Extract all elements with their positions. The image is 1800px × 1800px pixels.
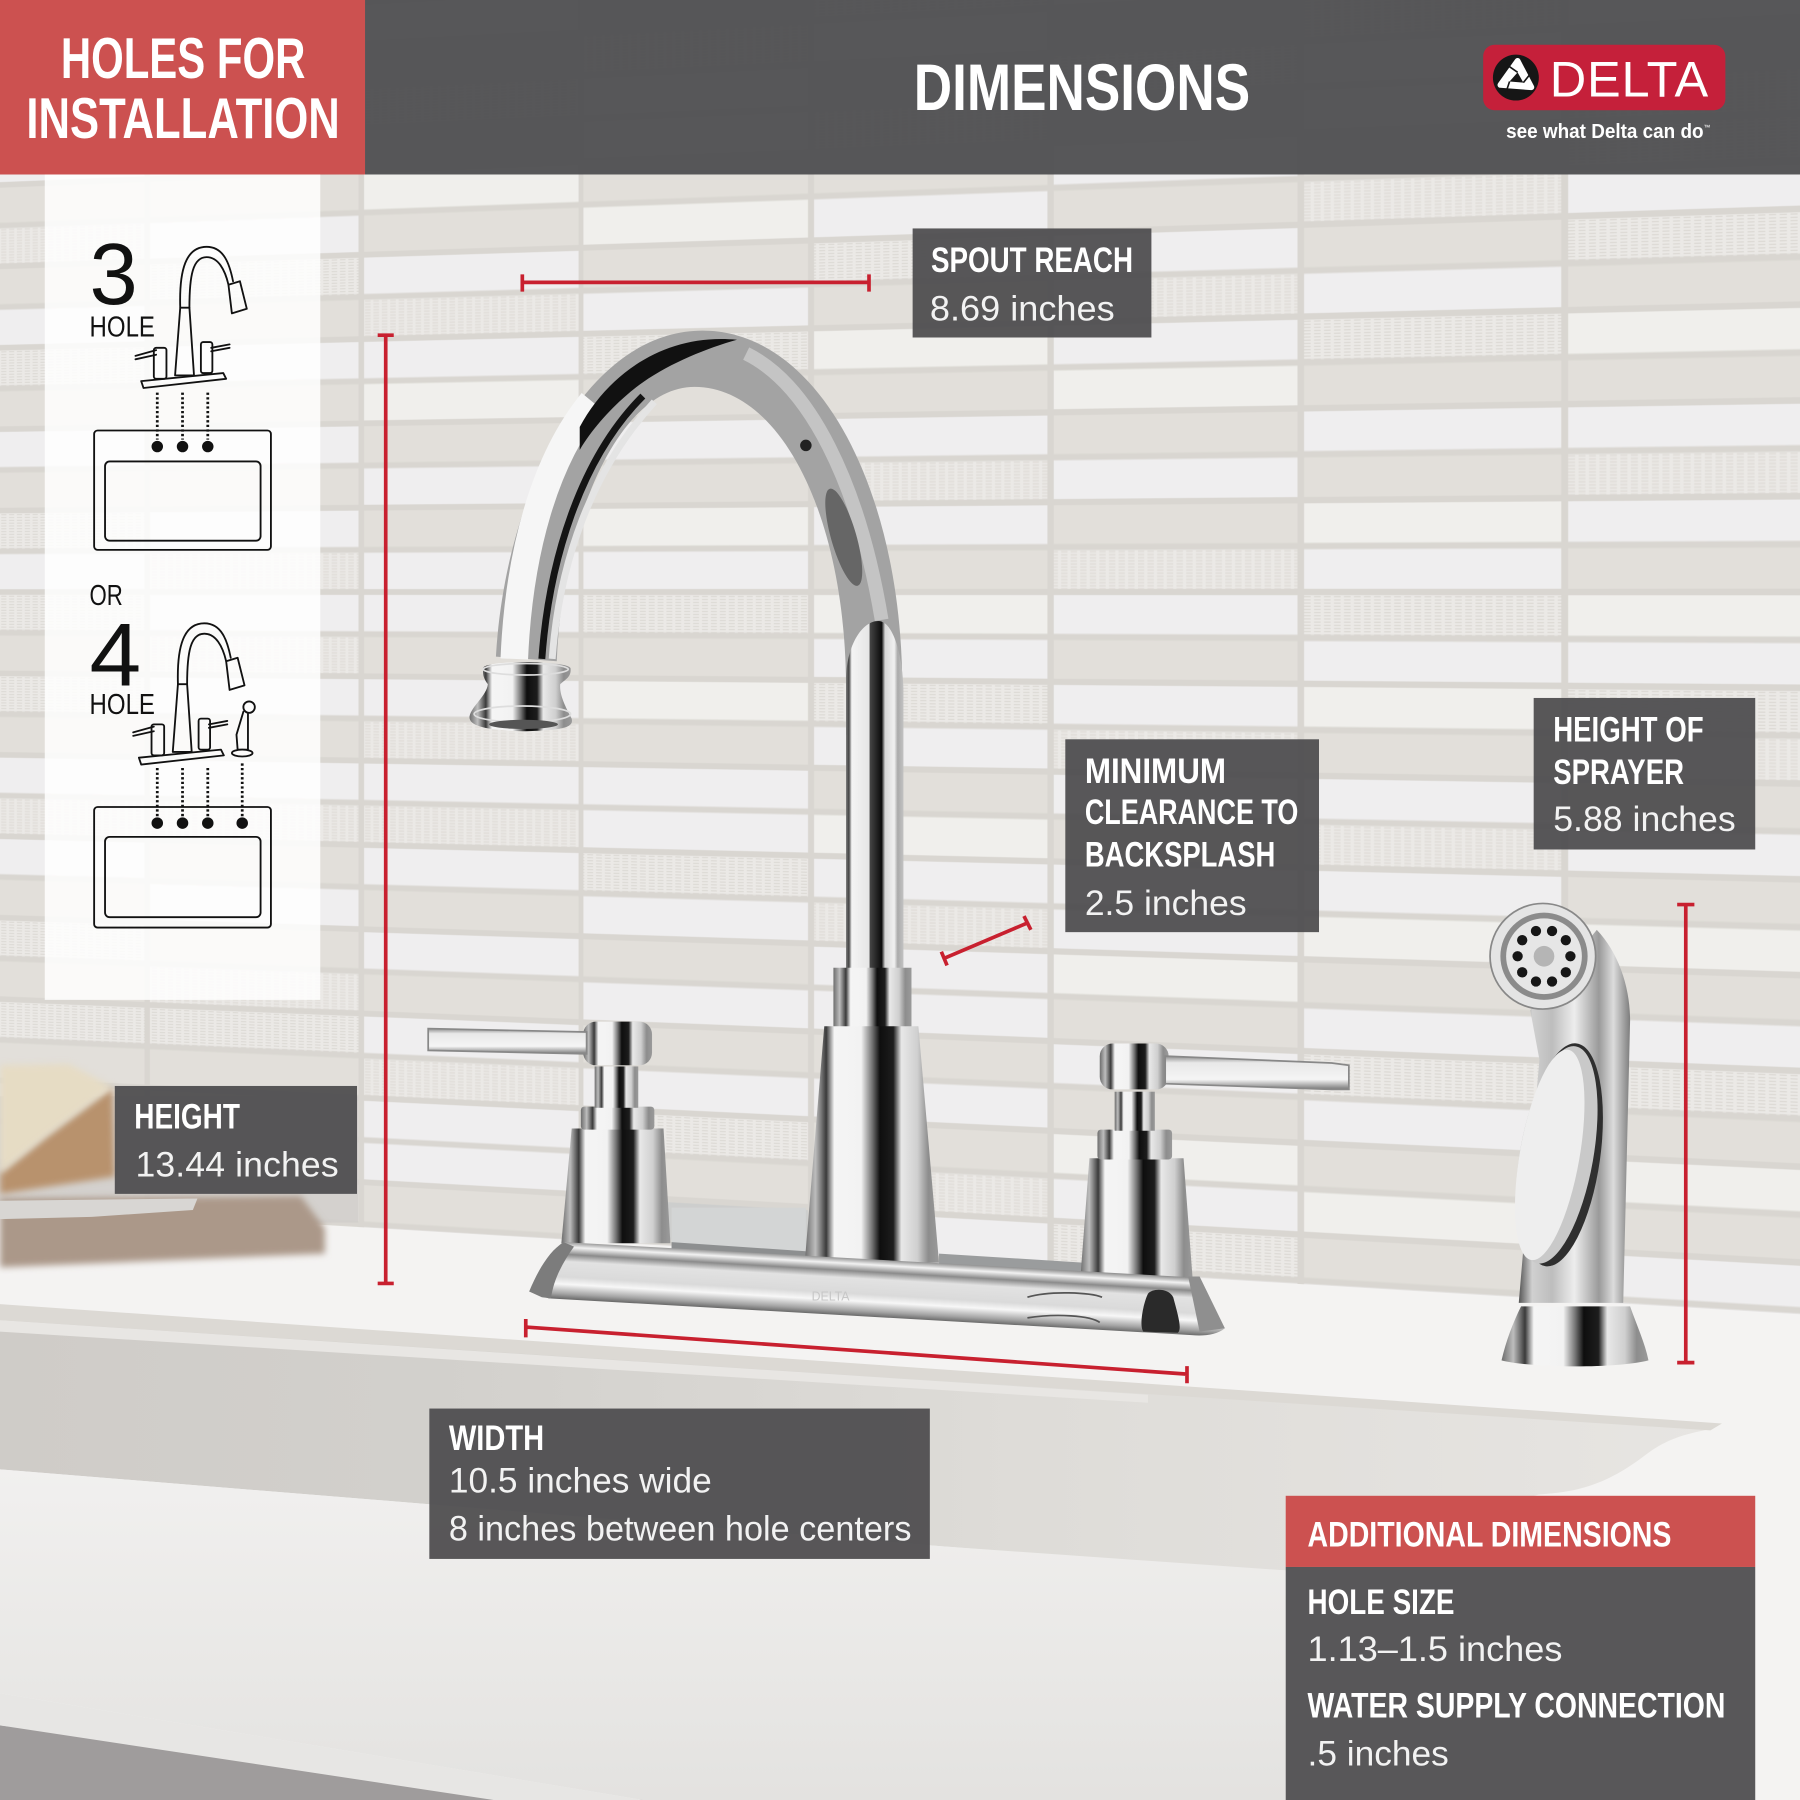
dimension line: width: [526, 1319, 1187, 1383]
dimension line: clearance: [941, 916, 1031, 965]
sprayer trigger: [1507, 1038, 1616, 1272]
Delta logo: [1483, 45, 1725, 143]
panel: additional dimensions: HOLE SIZE: [1308, 1582, 1454, 1622]
Delta logo: ™: [1704, 125, 1710, 132]
icon: delta triangle mark: [1493, 55, 1539, 101]
callout: minimum clearance: CLEARANCE TO: [1085, 792, 1298, 832]
callout: minimum clearance: 2.5 inches: [1085, 883, 1247, 923]
dimension line: spout reach: [522, 274, 869, 292]
icon: four hole faucet: [133, 623, 245, 765]
callout: spout reach: [913, 228, 1151, 338]
sprayer head: [1490, 903, 1596, 1009]
panel: additional dimensions: [1286, 1496, 1755, 1800]
cutting board with bread: [0, 1064, 325, 1267]
title: dimensions: DIMENSIONS: [914, 51, 1250, 124]
callout: width: 8 inches between hole centers: [449, 1509, 911, 1549]
callout: minimum clearance: MINIMUM: [1085, 751, 1226, 791]
callout: width: 10.5 inches wide: [449, 1460, 712, 1500]
Delta logo: see what Delta can do: [1506, 120, 1704, 143]
three hole diagram: 3: [90, 226, 138, 323]
callout: spout reach: 8.69 inches: [930, 288, 1115, 328]
callout: spout reach: SPOUT REACH: [931, 240, 1133, 280]
collar: [833, 968, 911, 1027]
main faucet: [428, 331, 1349, 1335]
left handle: [428, 1022, 670, 1243]
callout: height of sprayer: HEIGHT OF: [1553, 710, 1704, 750]
right handle: [1080, 1043, 1349, 1280]
heading: holes for installation: HOLES FOR: [61, 27, 305, 91]
icon: small sprayer: [232, 701, 255, 757]
blurred left wall background: [0, 1096, 358, 1223]
faucet reflection behind deck: [672, 1208, 806, 1254]
four hole diagram: OR: [90, 580, 123, 612]
heading: holes for installation: INSTALLATION: [26, 87, 340, 151]
deck logo: DELTA: [812, 1290, 850, 1304]
tile wall background: [0, 174, 1800, 1314]
heading: holes for installation: [26, 27, 340, 151]
four hole diagram: HOLE: [90, 689, 155, 721]
deck plate: [529, 1242, 1225, 1335]
callout: height: HEIGHT: [134, 1096, 240, 1136]
spout arc: [496, 331, 902, 735]
callout: minimum clearance: [1065, 739, 1319, 932]
aerator: [469, 662, 572, 731]
four hole diagram: [90, 580, 271, 928]
callout: width: [429, 1409, 930, 1559]
four hole diagram: 4: [90, 604, 141, 704]
stem: [846, 621, 903, 970]
dimension line: sprayer height: [1677, 905, 1694, 1363]
callout: width: WIDTH: [449, 1418, 544, 1458]
dimension line: height: [378, 335, 394, 1283]
icon: three hole faucet: [135, 247, 247, 388]
panel: additional dimensions: ADDITIONAL DIMENSIONS: [1308, 1514, 1671, 1554]
panel: additional dimensions: .5 inches: [1308, 1734, 1449, 1774]
callout: height of sprayer: 5.88 inches: [1553, 799, 1736, 839]
header bar: [0, 0, 1800, 174]
Delta logo: DELTA: [1550, 50, 1708, 107]
header red tab: [0, 0, 365, 174]
center cone: [805, 1026, 939, 1263]
callout: height: [115, 1086, 357, 1194]
three hole diagram: HOLE: [90, 311, 155, 343]
callout: height: 13.44 inches: [135, 1145, 339, 1185]
three hole diagram: [90, 226, 271, 550]
callout: minimum clearance: BACKSPLASH: [1085, 835, 1275, 875]
callout: height of sprayer: SPRAYER: [1553, 752, 1684, 792]
panel: additional dimensions: 1.13–1.5 inches: [1308, 1629, 1562, 1669]
panel: holes for installation: [45, 174, 320, 1000]
countertop and sink: [0, 1205, 1800, 1800]
side sprayer: [1490, 903, 1648, 1366]
callout: height of sprayer: [1534, 698, 1755, 849]
